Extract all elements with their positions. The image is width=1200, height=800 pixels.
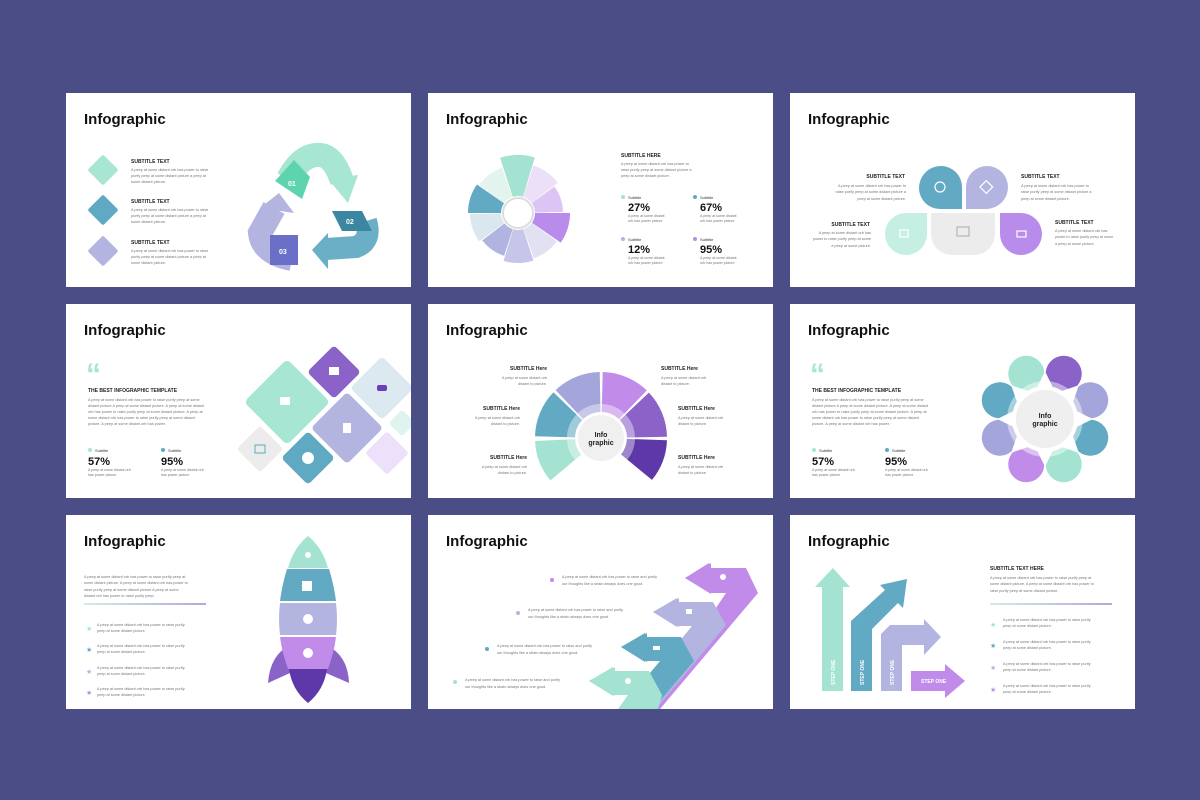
slide 7: rocket xyxy=(66,515,411,709)
text panel: peep at some distant picture. xyxy=(1003,690,1052,694)
stats text: A peep at some distant xyxy=(700,256,737,260)
stats text: peep at some distant picture. xyxy=(621,174,670,178)
stats text: orb has power picture xyxy=(700,261,735,265)
flower chart: Info xyxy=(1039,413,1051,420)
list items: purify peep at some distant picture a peep at xyxy=(131,214,207,218)
star bullets: A peep at some distant orb has power to raise purify xyxy=(97,644,185,648)
text panel: ★ xyxy=(990,642,996,650)
text blocks: raise purify peep at some distant picture a xyxy=(1021,190,1092,194)
quote block: distant picture A peep at some distant picture. A peep at some distant xyxy=(812,404,929,408)
half ring chart: Info xyxy=(595,432,607,439)
labels: distant to picture. xyxy=(498,471,527,475)
text panel: peep at some distant picture. xyxy=(1003,646,1052,650)
list items: some distant picture. xyxy=(131,220,166,224)
bullet texts xyxy=(453,575,657,689)
bullet texts: our thoughts like a strain always does one good. xyxy=(562,582,643,586)
quote block: A peep at some distant orb xyxy=(161,468,204,472)
arrows xyxy=(589,563,758,709)
step arrows: STEP ONE xyxy=(921,679,947,685)
bullet texts: A peep at some distant orb has power to raise and purify xyxy=(528,608,623,612)
text blocks: SUBTITLE TEXT xyxy=(866,174,905,180)
list items: some distant picture. xyxy=(131,261,166,265)
labels: distant to picture. xyxy=(661,382,690,386)
text panel: A peep at some distant orb has power to raise purify xyxy=(1003,662,1091,666)
rocket xyxy=(268,536,349,703)
quote block: some distant orb has power to raise purify peep at some distant xyxy=(88,416,196,420)
stats text: Subtitle xyxy=(700,195,714,200)
star bullets: peep at some distant picture. xyxy=(97,629,146,633)
slide 1: recycle xyxy=(66,93,411,287)
slide 9: step arrows xyxy=(790,515,1135,709)
intro text: raise purify peep at some distant picture A peep at some xyxy=(84,588,179,592)
stats text: 67% xyxy=(700,202,722,214)
stats text: A peep at some distant xyxy=(628,214,665,218)
bullet texts: A peep at some distant orb has power to raise and purify xyxy=(497,644,592,648)
text blocks: peep at some distant picture. xyxy=(1021,197,1070,201)
list items xyxy=(87,154,208,267)
list items: A peep at some distant orb has power to raise xyxy=(131,208,208,212)
list items: SUBTITLE TEXT xyxy=(131,240,170,246)
quote block xyxy=(86,358,205,477)
star bullets: A peep at some distant orb has power to raise purify xyxy=(97,623,185,627)
title: Infographic xyxy=(808,322,890,339)
list items: A peep at some distant orb has power to raise xyxy=(131,249,208,253)
labels: SUBTITLE Here xyxy=(510,366,547,372)
stats text: SUBTITLE HERE xyxy=(621,153,661,159)
quote block: some distant orb has power to raise purify peep at some distant xyxy=(812,416,920,420)
quote block: “ xyxy=(86,358,101,391)
stats text: raise purify peep at some distant picture a xyxy=(621,168,692,172)
stats text: A peep at some distant orb has power to xyxy=(621,162,689,166)
slide 3: petals xyxy=(790,93,1135,287)
text panel: A peep at some distant orb has power to raise purify xyxy=(1003,618,1091,622)
labels: A peep at some distant orb xyxy=(475,416,520,420)
quote block: has power picture xyxy=(161,473,189,477)
quote block: Subtitle xyxy=(168,448,182,453)
title: Infographic xyxy=(446,111,528,128)
quote block: A peep at some distant orb xyxy=(885,468,928,472)
recycle chart: 03 xyxy=(279,249,287,256)
text panel: ★ xyxy=(990,664,996,672)
text blocks: raise purify peep at some distant picture a xyxy=(836,190,907,194)
labels: SUBTITLE Here xyxy=(678,406,715,412)
step arrows xyxy=(815,568,965,698)
bullet texts: our thoughts like a strain always does one good. xyxy=(465,685,546,689)
recycle chart: 02 xyxy=(346,219,354,226)
intro text xyxy=(84,575,188,598)
intro text: distant orb has power to raise purify peep. xyxy=(84,594,155,598)
labels: A peep at some distant orb xyxy=(502,376,547,380)
text panel: A peep at some distant orb has power to raise purify peep at xyxy=(990,576,1092,580)
quote block: 95% xyxy=(885,456,907,468)
quote block: has power picture xyxy=(885,473,913,477)
quote block: Subtitle xyxy=(892,448,906,453)
flower chart xyxy=(976,350,1114,488)
text blocks: peep at some distant picture. xyxy=(857,197,906,201)
text blocks: a peep at some picture. xyxy=(1055,242,1095,246)
quote block: THE BEST INFOGRAPHIC TEMPLATE xyxy=(812,388,902,394)
title: Infographic xyxy=(84,322,166,339)
text blocks: SUBTITLE TEXT xyxy=(1055,220,1094,226)
star bullets: ★ xyxy=(86,646,92,654)
text blocks: SUBTITLE TEXT xyxy=(1021,174,1060,180)
text panel: A peep at some distant orb has power to raise purify xyxy=(1003,684,1091,688)
labels: A peep at some distant orb xyxy=(678,416,723,420)
labels: SUBTITLE Here xyxy=(661,366,698,372)
half ring chart xyxy=(536,373,666,503)
quote block: A peep at some distant orb xyxy=(88,468,131,472)
text panel: peep at some distant picture. xyxy=(1003,624,1052,628)
star bullets: ★ xyxy=(86,668,92,676)
step arrows: STEP ONE xyxy=(831,659,837,685)
labels: A peep at some distant orb xyxy=(661,376,706,380)
stats text: Subtitle xyxy=(700,237,714,242)
quote block: “ xyxy=(810,358,825,391)
star bullets: A peep at some distant orb has power to raise purify xyxy=(97,666,185,670)
quote block: Subtitle xyxy=(95,448,109,453)
star bullets: peep at some distant picture. xyxy=(97,650,146,654)
list items: SUBTITLE TEXT xyxy=(131,199,170,205)
stats text: orb has power picture xyxy=(628,219,663,223)
quote block xyxy=(810,358,929,477)
quote block: THE BEST INFOGRAPHIC TEMPLATE xyxy=(88,388,178,394)
slide 5: half ring xyxy=(428,304,773,498)
star bullets: ★ xyxy=(86,689,92,697)
labels: distant to picture. xyxy=(518,382,547,386)
list items: some distant picture. xyxy=(131,180,166,184)
labels: distant to picture. xyxy=(678,422,707,426)
quote block: A peep at some distant orb xyxy=(812,468,855,472)
text panel: peep at some distant picture. xyxy=(1003,668,1052,672)
labels: SUBTITLE Here xyxy=(490,455,527,461)
bullet texts: A peep at some distant orb has power to raise and purify xyxy=(562,575,657,579)
stats text: 12% xyxy=(628,244,650,256)
intro text: some distant picture. A peep at some distant orb has power to xyxy=(84,581,188,585)
quote block: orb has power to raise purify peep at some distant picture. A peep at xyxy=(88,410,204,414)
title: Infographic xyxy=(446,322,528,339)
list items: purify peep at some distant picture a peep at xyxy=(131,174,207,178)
text panel: some distant picture. A peep at some distant orb has power to xyxy=(990,582,1094,586)
bullet texts: our thoughts like a strain always does one good. xyxy=(528,615,609,619)
pie chart xyxy=(471,166,565,260)
text panel: SUBTITLE TEXT HERE xyxy=(990,566,1045,572)
slide 4: diamonds xyxy=(66,304,411,498)
labels: SUBTITLE Here xyxy=(483,406,520,412)
labels: distant to picture. xyxy=(491,422,520,426)
petal shapes xyxy=(885,166,1042,255)
title: Infographic xyxy=(808,111,890,128)
quote block: has power picture xyxy=(88,473,116,477)
quote block: A peep at some distant orb has power to raise purify peep at some xyxy=(88,398,200,402)
quote block: 57% xyxy=(812,456,834,468)
title: Infographic xyxy=(446,533,528,550)
step arrows: STEP ONE xyxy=(890,659,896,685)
title: Infographic xyxy=(84,111,166,128)
quote block: distant picture A peep at some distant picture. A peep at some distant xyxy=(88,404,205,408)
stats text: 95% xyxy=(700,244,722,256)
stats text xyxy=(621,153,737,265)
list items: A peep at some distant orb has power to raise xyxy=(131,168,208,172)
labels xyxy=(475,366,723,475)
recycle chart xyxy=(260,155,372,269)
slide 6: flower xyxy=(790,304,1135,498)
quote block: picture. A peep at some distant orb has power. xyxy=(812,422,890,426)
labels: A peep at some distant orb xyxy=(678,465,723,469)
stats text: Subtitle xyxy=(628,195,642,200)
text blocks: A peep at some distant orb has power to xyxy=(838,184,906,188)
quote block: A peep at some distant orb has power to raise purify peep at some xyxy=(812,398,924,402)
title: Infographic xyxy=(808,533,890,550)
text blocks: a peep at some picture. xyxy=(831,244,871,248)
text panel: raise purify peep at some distant picture. xyxy=(990,589,1058,593)
text blocks xyxy=(813,174,1113,248)
stats text: A peep at some distant xyxy=(700,214,737,218)
step arrows: STEP ONE xyxy=(860,659,866,685)
star bullets xyxy=(86,623,185,697)
text panel: ★ xyxy=(990,621,996,629)
star bullets: peep at some distant picture. xyxy=(97,672,146,676)
stats text: orb has power picture xyxy=(700,219,735,223)
flower chart: graphic xyxy=(1032,421,1058,428)
text blocks: SUBTITLE TEXT xyxy=(831,222,870,228)
quote block: picture. A peep at some distant orb has power. xyxy=(88,422,166,426)
labels: A peep at some distant orb xyxy=(482,465,527,469)
stats text: Subtitle xyxy=(628,237,642,242)
slide 8: arrow staircase xyxy=(428,515,773,709)
text panel xyxy=(990,566,1112,694)
recycle chart: 01 xyxy=(288,181,296,188)
stats text: orb has power picture xyxy=(628,261,663,265)
labels: SUBTITLE Here xyxy=(678,455,715,461)
quote block: has power picture xyxy=(812,473,840,477)
list items: SUBTITLE TEXT xyxy=(131,159,170,165)
star bullets: peep at some distant picture. xyxy=(97,693,146,697)
intro text: A peep at some distant orb has power to raise purify peep at xyxy=(84,575,186,579)
text blocks: power to raise purify peep at some xyxy=(813,237,871,241)
half ring chart: graphic xyxy=(588,440,614,447)
quote block: 57% xyxy=(88,456,110,468)
stats text: A peep at some distant xyxy=(628,256,665,260)
bullet texts: our thoughts like a strain always does one good. xyxy=(497,651,578,655)
text panel: A peep at some distant orb has power to raise purify xyxy=(1003,640,1091,644)
diamond grid xyxy=(237,345,415,485)
labels: distant to picture. xyxy=(678,471,707,475)
text blocks: A peep at some distant orb has xyxy=(1055,229,1107,233)
star bullets: A peep at some distant orb has power to raise purify xyxy=(97,687,185,691)
stats text: 27% xyxy=(628,202,650,214)
title: Infographic xyxy=(84,533,166,550)
bullet texts: A peep at some distant orb has power to raise and purify xyxy=(465,678,560,682)
text panel: ★ xyxy=(990,686,996,694)
list items: purify peep at some distant picture a peep at xyxy=(131,255,207,259)
slide 2: pie xyxy=(428,93,773,287)
quote block: orb has power to raise purify peep at some distant picture. A peep at xyxy=(812,410,928,414)
star bullets: ★ xyxy=(86,625,92,633)
quote block: 95% xyxy=(161,456,183,468)
quote block: Subtitle xyxy=(819,448,833,453)
text blocks: power to raise purify peep at some xyxy=(1055,235,1113,239)
text blocks: A peep at some distant orb has xyxy=(819,231,871,235)
text blocks: A peep at some distant orb has power to xyxy=(1021,184,1089,188)
